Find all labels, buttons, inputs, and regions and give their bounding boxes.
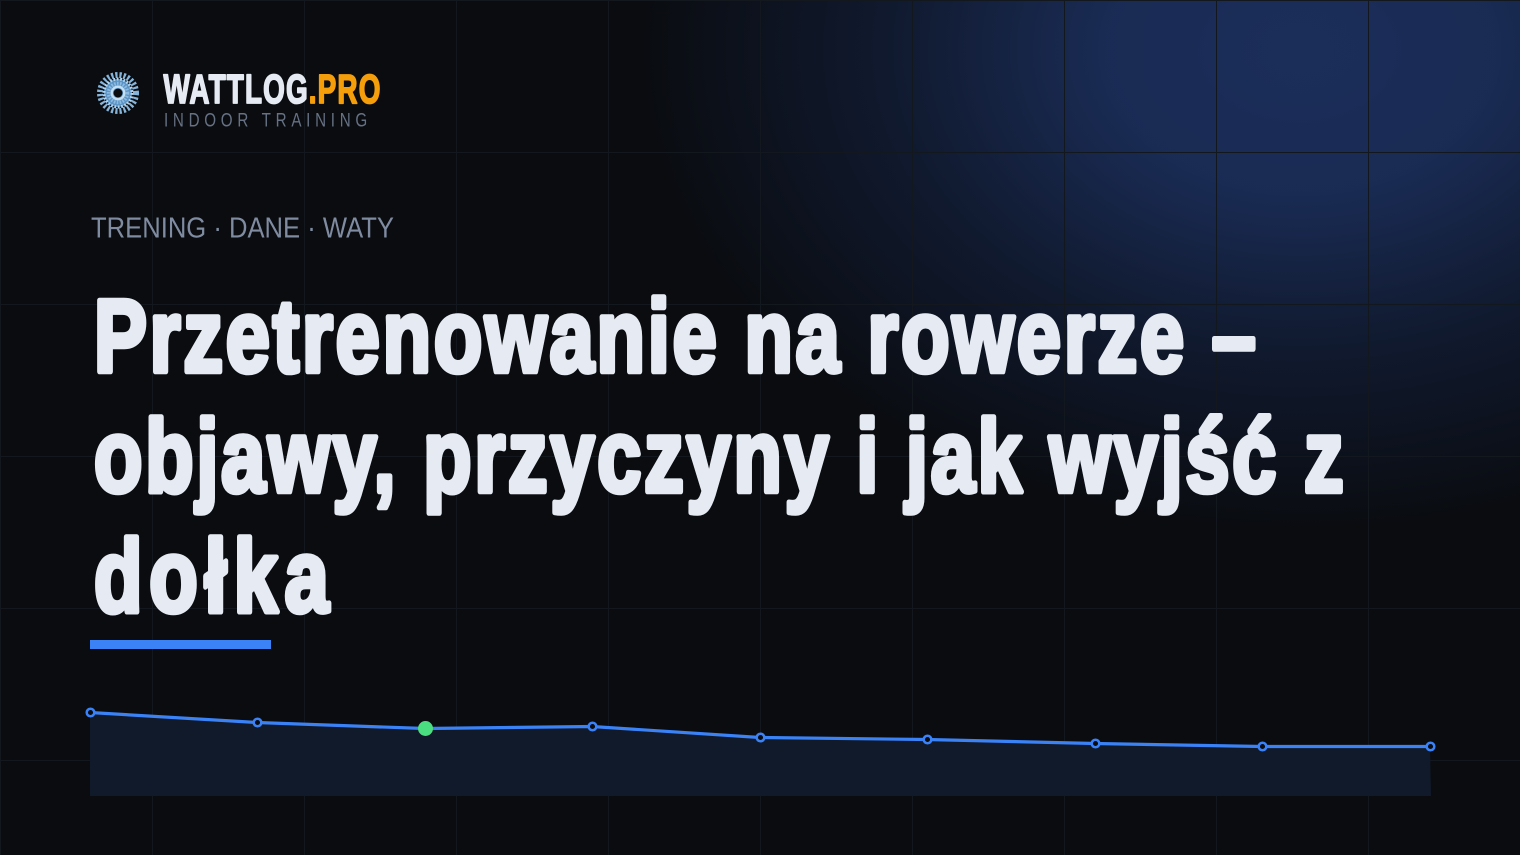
brand tagline: INDOOR TRAINING [164, 109, 367, 131]
title: dołka [94, 520, 330, 634]
chart line [90, 712, 1430, 746]
eyebrow label: TRENING · DANE · WATY [91, 212, 394, 244]
chart area fill [90, 712, 1431, 796]
title [94, 280, 1344, 634]
line chart [87, 709, 1434, 796]
chart data points [87, 709, 1434, 750]
title: Przetrenowanie na rowerze – [94, 280, 1256, 394]
icon: cassette gear logo [100, 75, 136, 111]
highlighted data point [418, 721, 433, 736]
brand wordmark: WATTLOG.PRO [163, 67, 380, 112]
title: objawy, przyczyny i jak wyjść z [94, 400, 1344, 514]
title accent underline [90, 640, 271, 649]
